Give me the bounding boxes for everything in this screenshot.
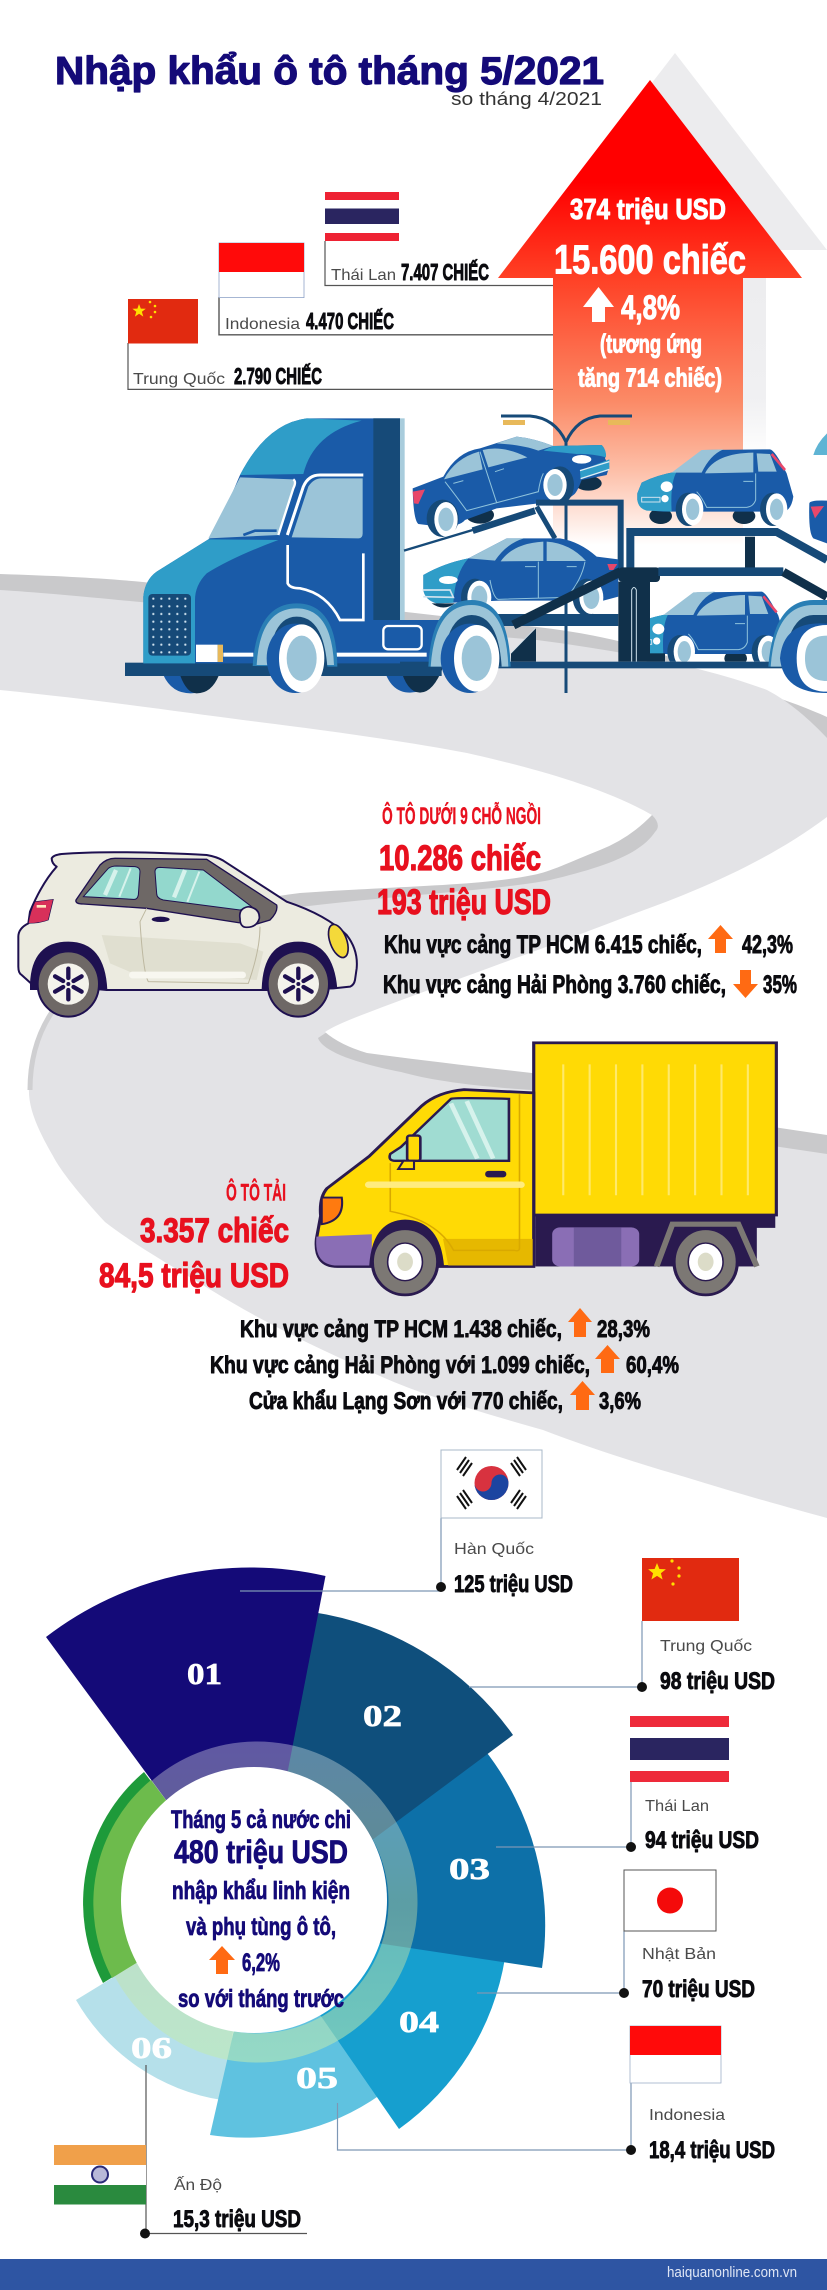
center text block: Tháng 5 cả nước chi [171,1806,351,1834]
center text block: và phụ tùng ô tô, [186,1913,336,1941]
road background [0,574,827,1518]
arrow text: value: 374 triệu USD [570,194,726,226]
inner green arc [93,1780,220,1978]
sector number 05: 05 [296,2060,338,2095]
center text block: so với tháng trước [178,1985,344,2013]
callout: China [469,1558,775,1695]
grey background arrow [523,53,827,460]
sector 06 [76,1890,256,2100]
callout: Thailand: 94 triệu USD [645,1827,759,1854]
upper hatchback [637,449,793,526]
car carrier truck: tractor [125,418,443,693]
callout: China cars: 2.790 CHIẾC [234,362,322,389]
callout: China: 98 triệu USD [660,1668,775,1695]
line: HCM port cars: Khu vực cảng TP HCM 6.415 chiếc, [384,931,702,959]
right wheel [768,600,827,693]
sector 05 [210,1925,380,2138]
center text block [171,1806,351,2013]
line: Hai Phong port trucks: 60,4% [626,1352,679,1379]
line: Lang Son border trucks: 3,6% [599,1388,641,1415]
line: HCM port trucks: Khu vực cảng TP HCM 1.438 chiếc, [240,1316,562,1343]
callout: India: Ấn Độ [174,2175,222,2194]
sector number 01: 01 [187,1656,222,1691]
center disc [121,1767,387,2033]
arrow text: percent: 4,8% [621,289,680,327]
callout: Indonesia cars: 4.470 CHIẾC [306,307,394,334]
callout: Indonesia: Indonesia [649,2107,725,2124]
heading: trucks: Ô TÔ TẢI [226,1178,286,1206]
stat: cars value: 193 triệu USD [377,883,551,922]
radial chart: components by country [46,1567,545,2138]
center text block: nhập khẩu linh kiện [172,1877,350,1905]
callout: South Korea [240,1450,573,1598]
callout: Thailand [496,1716,759,1854]
callout: Japan: 70 triệu USD [642,1976,755,2003]
callout: India: 15,3 triệu USD [173,2206,301,2233]
stat: cars units: 10.286 chiếc [379,839,541,878]
sector number 04: 04 [399,2004,439,2039]
car carrier truck: trailer frame and cars [400,433,827,693]
yellow truck illustration [316,1043,776,1295]
line: HCM port trucks: 28,3% [597,1316,650,1343]
callout: Indonesia cars: Indonesia [225,316,300,333]
title: Nhập khẩu ô tô tháng 5/2021 [55,50,604,93]
callout: China cars [128,299,553,389]
callout: China cars: Trung Quốc [133,371,225,388]
line: Hai Phong port cars: 35% [763,971,797,999]
center text block: 480 triệu USD [174,1834,348,1870]
line: Hai Phong port trucks: Khu vực cảng Hải Phòng với 1.099 chiếc, [210,1352,590,1379]
callout: South Korea: 125 triệu USD [454,1571,573,1598]
outer green arc [83,1772,220,1983]
center text block: 6,2% [242,1949,280,1977]
sector 02 [258,1612,513,1925]
lower hatchback [647,592,780,662]
red arrow [498,80,802,545]
callout: Japan [477,1870,755,2003]
subtitle: so tháng 4/2021 [451,89,602,109]
arrow text: equivalent: (tương ứng [600,328,702,358]
callout: India [54,2065,307,2238]
line: Lang Son border trucks: Cửa khẩu Lạng Sơn với 770 chiếc, [249,1388,563,1415]
line: Hai Phong port cars: Khu vực cảng Hải Phòng 3.760 chiếc, [383,971,726,999]
stat: truck value: 84,5 triệu USD [99,1257,289,1295]
sector number 06: 06 [131,2030,172,2065]
sector 01 [46,1567,326,1925]
callout: China: Trung Quốc [660,1638,752,1655]
trailer frame [404,503,827,570]
translucent ring [111,1756,403,2048]
arrow text: units: 15.600 chiếc [554,236,746,282]
footer bar: haiquanonline.com.vn [667,2264,797,2281]
callout: Indonesia cars [219,243,553,335]
street lamp [501,416,632,693]
callout: Indonesia [338,2026,775,2164]
callout: Thailand: Thái Lan [645,1798,709,1815]
callout: Thailand cars: 7.407 CHIẾC [401,258,489,285]
arrow text: increase: tăng 714 chiếc) [578,362,722,392]
heading: cars under 9 seats: Ô TÔ DƯỚI 9 CHỖ NGỒI [382,801,541,830]
callout: Thailand cars [325,192,553,286]
middle wheel [428,600,511,693]
sector number 03: 03 [449,1851,490,1886]
lower sedan [423,538,618,616]
callout: Thailand cars: Thái Lan [331,267,396,284]
callout: Indonesia: 18,4 triệu USD [649,2137,775,2164]
sector number 02: 02 [363,1698,402,1733]
sector 04 [258,1925,505,2129]
edge car [809,433,827,543]
callout: South Korea: Hàn Quốc [454,1541,534,1558]
trailer lower frame [400,567,827,668]
stat: truck units: 3.357 chiếc [140,1212,289,1250]
sector 03 [258,1749,545,1968]
icon: white up arrow [583,287,614,322]
footer bar [0,2259,827,2290]
callout: Japan: Nhật Bản [642,1946,716,1963]
upper sedan [413,437,609,537]
line: HCM port cars: 42,3% [742,931,793,959]
white car illustration [18,852,357,1017]
